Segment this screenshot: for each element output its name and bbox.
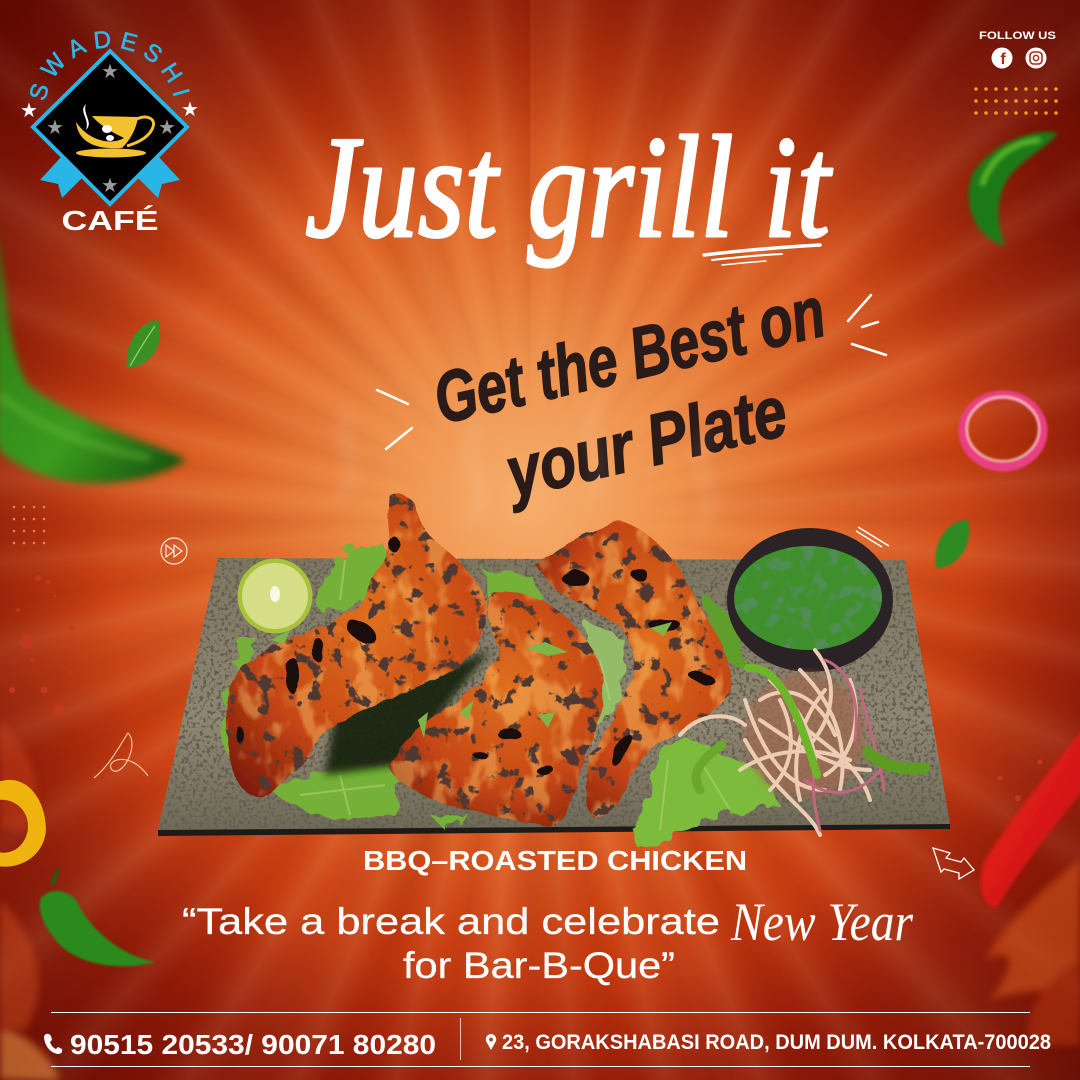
quote script words: New Year xyxy=(730,892,914,952)
quote line 2: for Bar-B-Que” xyxy=(403,945,675,986)
flames: bottom right xyxy=(985,860,1080,1045)
dot grid: left xyxy=(13,506,45,544)
quote line 1: “Take a break and celebrate xyxy=(182,901,720,942)
slogan line 2: your Plate xyxy=(496,372,794,514)
chutney bowl xyxy=(727,528,893,672)
logo stars: ★ xyxy=(20,98,38,122)
logo stars: ★ xyxy=(101,59,119,83)
onion salad xyxy=(680,650,884,835)
flames: bottom left xyxy=(0,720,39,1030)
follow us label: FOLLOW US xyxy=(979,30,1056,42)
accent marks around slogan xyxy=(377,295,886,449)
icon: fast-forward circle xyxy=(161,538,187,564)
chicken: middle thigh xyxy=(388,592,604,827)
footer rules xyxy=(51,1012,1030,1066)
basil leaf: left xyxy=(127,320,160,368)
chicken: right drumstick xyxy=(535,520,732,818)
logo coffee cup xyxy=(76,104,154,158)
chicken char marks xyxy=(236,537,717,775)
plate xyxy=(150,550,960,840)
logo stars: ★ xyxy=(181,97,199,121)
icon: squiggle line xyxy=(94,733,148,778)
footer contact bar xyxy=(44,1012,1051,1066)
chili: red right xyxy=(981,728,1080,908)
logo diamond xyxy=(33,51,187,204)
phone numbers: 90515 20533/ 90071 80280 xyxy=(70,1029,436,1060)
subtitle: BBQ-roasted chicken: BBQ–ROASTED CHICKEN xyxy=(363,845,747,876)
herb garnish xyxy=(270,622,672,738)
pepper: yellow left xyxy=(0,780,46,867)
chili: green top right xyxy=(969,132,1058,246)
lettuce highlights xyxy=(300,560,730,830)
logo stars: ★ xyxy=(158,115,176,139)
title underline stroke xyxy=(704,245,820,265)
logo stars: ★ xyxy=(46,115,64,139)
slogan line 1: Get the Best on xyxy=(427,272,832,440)
quote xyxy=(182,892,914,986)
dot grid: top right xyxy=(974,87,1058,115)
logo stars xyxy=(20,59,199,197)
icon: instagram xyxy=(1026,48,1046,68)
icon: facebook: f xyxy=(1000,51,1006,68)
chicken: left quarter xyxy=(226,493,488,798)
chili: green bottom left xyxy=(40,870,155,966)
logo: Swadeshi Café xyxy=(20,31,199,236)
slogan: Get the Best on your Plate xyxy=(427,272,832,514)
plate with food xyxy=(150,480,960,850)
logo stars: ★ xyxy=(101,173,119,197)
logo wordmark arc: SWADESHI xyxy=(30,31,190,100)
logo ribbons xyxy=(40,156,180,198)
title: Just grill it: Just grill it xyxy=(305,106,833,268)
lime xyxy=(238,558,312,634)
onion shadow mass xyxy=(745,673,865,797)
green pepper strip xyxy=(748,668,817,775)
steam above chicken xyxy=(340,400,710,530)
shadow under chicken xyxy=(325,650,490,775)
icon: location pin xyxy=(486,1034,496,1050)
accent marks near bowl xyxy=(856,527,889,547)
green pepper pieces xyxy=(696,745,924,790)
lettuce behind chicken xyxy=(220,545,780,850)
spice speckles: left xyxy=(9,575,1042,801)
address: 23, GORAKSHABASI ROAD, DUM DUM. KOLKATA-700028 xyxy=(502,1031,1051,1054)
basil leaf: right xyxy=(935,520,969,568)
social: follow us xyxy=(979,30,1056,68)
onion ring: right xyxy=(963,395,1043,467)
icon: arrow right xyxy=(933,848,974,879)
logo café text: CAFÉ xyxy=(62,205,158,236)
flame glow: bottom left corner xyxy=(0,1030,60,1080)
chili: large green left xyxy=(0,225,186,484)
icon: phone xyxy=(44,1034,62,1054)
